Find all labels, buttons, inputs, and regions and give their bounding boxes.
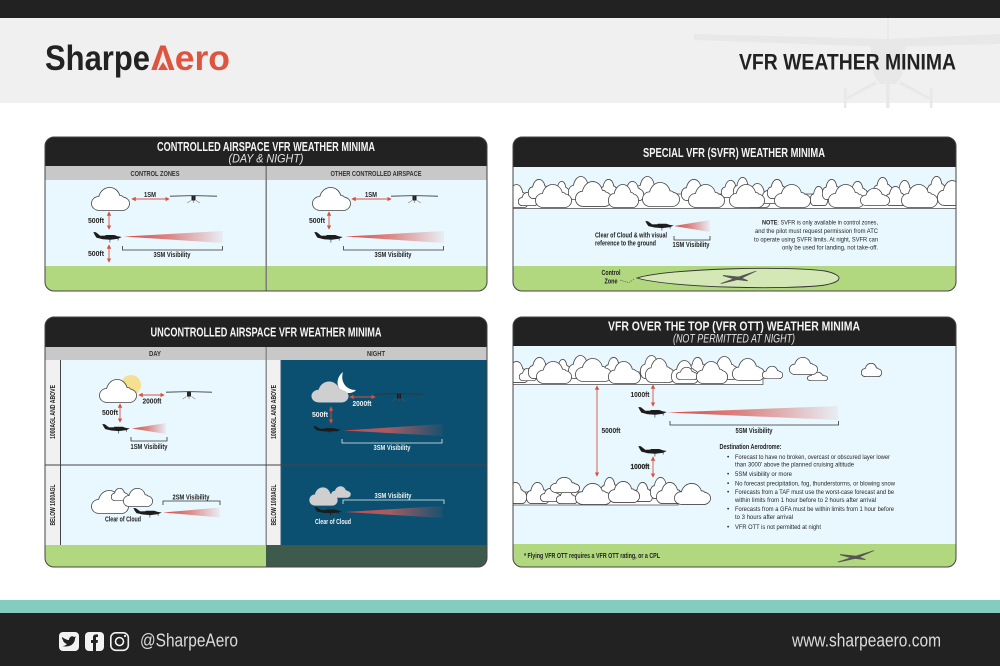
diagram: night below 1000AGL bbox=[309, 486, 444, 526]
diagram: control zones bbox=[88, 188, 223, 262]
top bar bbox=[0, 0, 1000, 18]
heading: controlled airspace: CONTROLLED AIRSPACE VFR WEATHER MINIMA bbox=[157, 140, 375, 154]
diagram: day above 1000AGL: 2000ft bbox=[142, 398, 162, 406]
text: destination aerodrome: • bbox=[727, 471, 729, 478]
title: VFR WEATHER MINIMA bbox=[739, 50, 956, 74]
subheading: night: NIGHT bbox=[367, 351, 386, 358]
label: control zone: Control bbox=[602, 270, 621, 277]
diagram: other controlled airspace: 500ft bbox=[309, 218, 326, 225]
panel: special VFR bbox=[505, 137, 969, 291]
diagram: separation arrows and aircraft: 1000ft bbox=[630, 464, 650, 471]
diagram: separation arrows and aircraft: 5SM Visibility bbox=[736, 428, 773, 435]
diagram: night above 1000AGL: 3SM Visibility bbox=[374, 445, 411, 452]
panel: uncontrolled airspace bbox=[45, 317, 487, 567]
label: clear of cloud: reference to the ground bbox=[595, 240, 656, 248]
label: control zone: Zone bbox=[604, 278, 618, 286]
label: night below 1000AGL: BELOW 1000AGL bbox=[271, 484, 278, 526]
diagram: night below 1000AGL: 3SM Visibility bbox=[374, 493, 412, 500]
diagram: night above 1000AGL bbox=[311, 372, 443, 452]
diagram: other controlled airspace: 1SM bbox=[365, 192, 377, 199]
text: destination aerodrome: • bbox=[727, 480, 729, 488]
text: destination aerodrome: • bbox=[727, 489, 729, 496]
text: destination aerodrome: VFR OTT is not permitted at night bbox=[735, 524, 821, 531]
panel: VFR over the top bbox=[505, 317, 956, 567]
text: destination aerodrome: Forecast to have no broken, overcast or obscured layer lower bbox=[735, 454, 891, 461]
text: destination aerodrome: within limits from 1 hour before to 2 hours after arrival bbox=[734, 497, 876, 504]
subheading: control zones: CONTROL ZONES bbox=[130, 171, 180, 178]
logo: Λero bbox=[151, 39, 230, 78]
icon: background aircraft silhouette bbox=[694, 18, 1000, 108]
text: destination aerodrome: Forecasts from a GFA must be within limits from 1 hour before bbox=[735, 506, 894, 513]
label: night 1000AGL and above: 1000AGL AND ABOVE bbox=[271, 385, 278, 439]
text: destination aerodrome: • bbox=[727, 454, 729, 461]
diagram: separation arrows and aircraft: 5000ft bbox=[602, 428, 621, 435]
diagram: control zones: 3SM Visibility bbox=[154, 252, 191, 259]
subheading: other controlled airspace: OTHER CONTROLLED AIRSPACE bbox=[330, 171, 422, 178]
heading: controlled airspace bbox=[157, 140, 375, 166]
footer accent band bbox=[0, 600, 1000, 613]
diagram: day below 1000AGL: 2SM Visibility bbox=[172, 494, 210, 502]
note: NOTE: SVFR is only available in control zones, bbox=[762, 220, 878, 226]
heading: VFR over the top bbox=[608, 320, 860, 346]
diagram: other controlled airspace: 3SM Visibility bbox=[374, 252, 412, 259]
heading: VFR over the top: VFR OVER THE TOP (VFR OTT) WEATHER MINIMA bbox=[608, 320, 860, 334]
icon: aircraft top view bbox=[837, 550, 874, 562]
label: 1SM visibility: 1SM Visibility bbox=[672, 242, 710, 249]
icon: twitter bbox=[59, 632, 79, 651]
heading: controlled airspace: (DAY & NIGHT) bbox=[228, 152, 304, 166]
note: to operate using SVFR limits. At night, SVFR can bbox=[754, 236, 878, 244]
text: destination aerodrome bbox=[720, 444, 895, 531]
diagram: day above 1000AGL bbox=[99, 375, 212, 451]
text: destination aerodrome: Destination Aerodrome: bbox=[720, 444, 782, 451]
diagram: separation arrows and aircraft bbox=[597, 385, 838, 477]
diagram: day below 1000AGL bbox=[91, 488, 220, 524]
panel: controlled airspace bbox=[45, 137, 487, 291]
diagram: control zones: 1SM bbox=[144, 192, 156, 199]
heading: special VFR: SPECIAL VFR (SVFR) WEATHER MINIMA bbox=[643, 146, 825, 160]
footnote: * Flying VFR OTT requires a VFR OTT rating, or a CPL bbox=[524, 553, 661, 560]
diagram: night above 1000AGL: 2000ft bbox=[352, 401, 372, 408]
note: only be used for landing, not take-off. bbox=[782, 244, 878, 252]
icon: facebook bbox=[85, 632, 104, 651]
diagram: day above 1000AGL: 500ft bbox=[102, 410, 119, 417]
text: destination aerodrome: Forecasts from a TAF must use the worst-case forecast and be bbox=[735, 489, 894, 496]
heading: uncontrolled airspace: UNCONTROLLED AIRSPACE VFR WEATHER MINIMA bbox=[150, 326, 382, 340]
website: www.sharpeaero.com bbox=[791, 630, 941, 650]
text: destination aerodrome: than 3000' above the planned cruising altitude bbox=[735, 462, 854, 468]
subheading: day: DAY bbox=[149, 351, 161, 358]
diagram: night below 1000AGL: Clear of Cloud bbox=[315, 519, 351, 526]
text: destination aerodrome: 5SM visibility or more bbox=[735, 471, 792, 478]
diagram: control zones: 500ft bbox=[88, 251, 105, 258]
diagram: separation arrows and aircraft: 1000ft bbox=[630, 392, 650, 399]
diagram: other controlled airspace bbox=[309, 188, 444, 259]
footer bbox=[0, 613, 1000, 666]
header band bbox=[0, 18, 1000, 103]
logo: Sharpe bbox=[45, 39, 150, 78]
icon: aircraft top view bbox=[720, 271, 757, 284]
social handle: @SharpeAero bbox=[140, 630, 238, 650]
text: destination aerodrome: No forecast precipitation, fog, thunderstorms, or blowing snow bbox=[735, 480, 895, 488]
icon: aircraft and visibility beam bbox=[645, 220, 710, 240]
label: day below 1000AGL: BELOW 1000AGL bbox=[50, 484, 57, 526]
label: day 1000AGL and above: 1000AGL AND ABOVE bbox=[50, 385, 57, 439]
label: control zone bbox=[602, 270, 634, 286]
icon: instagram bbox=[111, 633, 128, 650]
heading: VFR over the top: (NOT PERMITTED AT NIGHT) bbox=[673, 332, 795, 346]
note bbox=[754, 220, 878, 252]
label: clear of cloud bbox=[595, 232, 667, 248]
diagram: night above 1000AGL: 500ft bbox=[312, 412, 329, 419]
logo bbox=[45, 39, 230, 78]
diagram: control zones: 500ft bbox=[88, 218, 105, 225]
diagram: day above 1000AGL: 1SM Visibility bbox=[130, 444, 168, 451]
text: destination aerodrome: • bbox=[727, 524, 729, 531]
text: destination aerodrome: • bbox=[727, 506, 729, 513]
label: clear of cloud: Clear of Cloud & with visual bbox=[595, 232, 667, 240]
note: and the pilot must request permission from ATC bbox=[755, 228, 878, 235]
diagram: day below 1000AGL: Clear of Cloud bbox=[105, 516, 141, 524]
text: destination aerodrome: to 3 hours after arrival bbox=[735, 514, 793, 521]
